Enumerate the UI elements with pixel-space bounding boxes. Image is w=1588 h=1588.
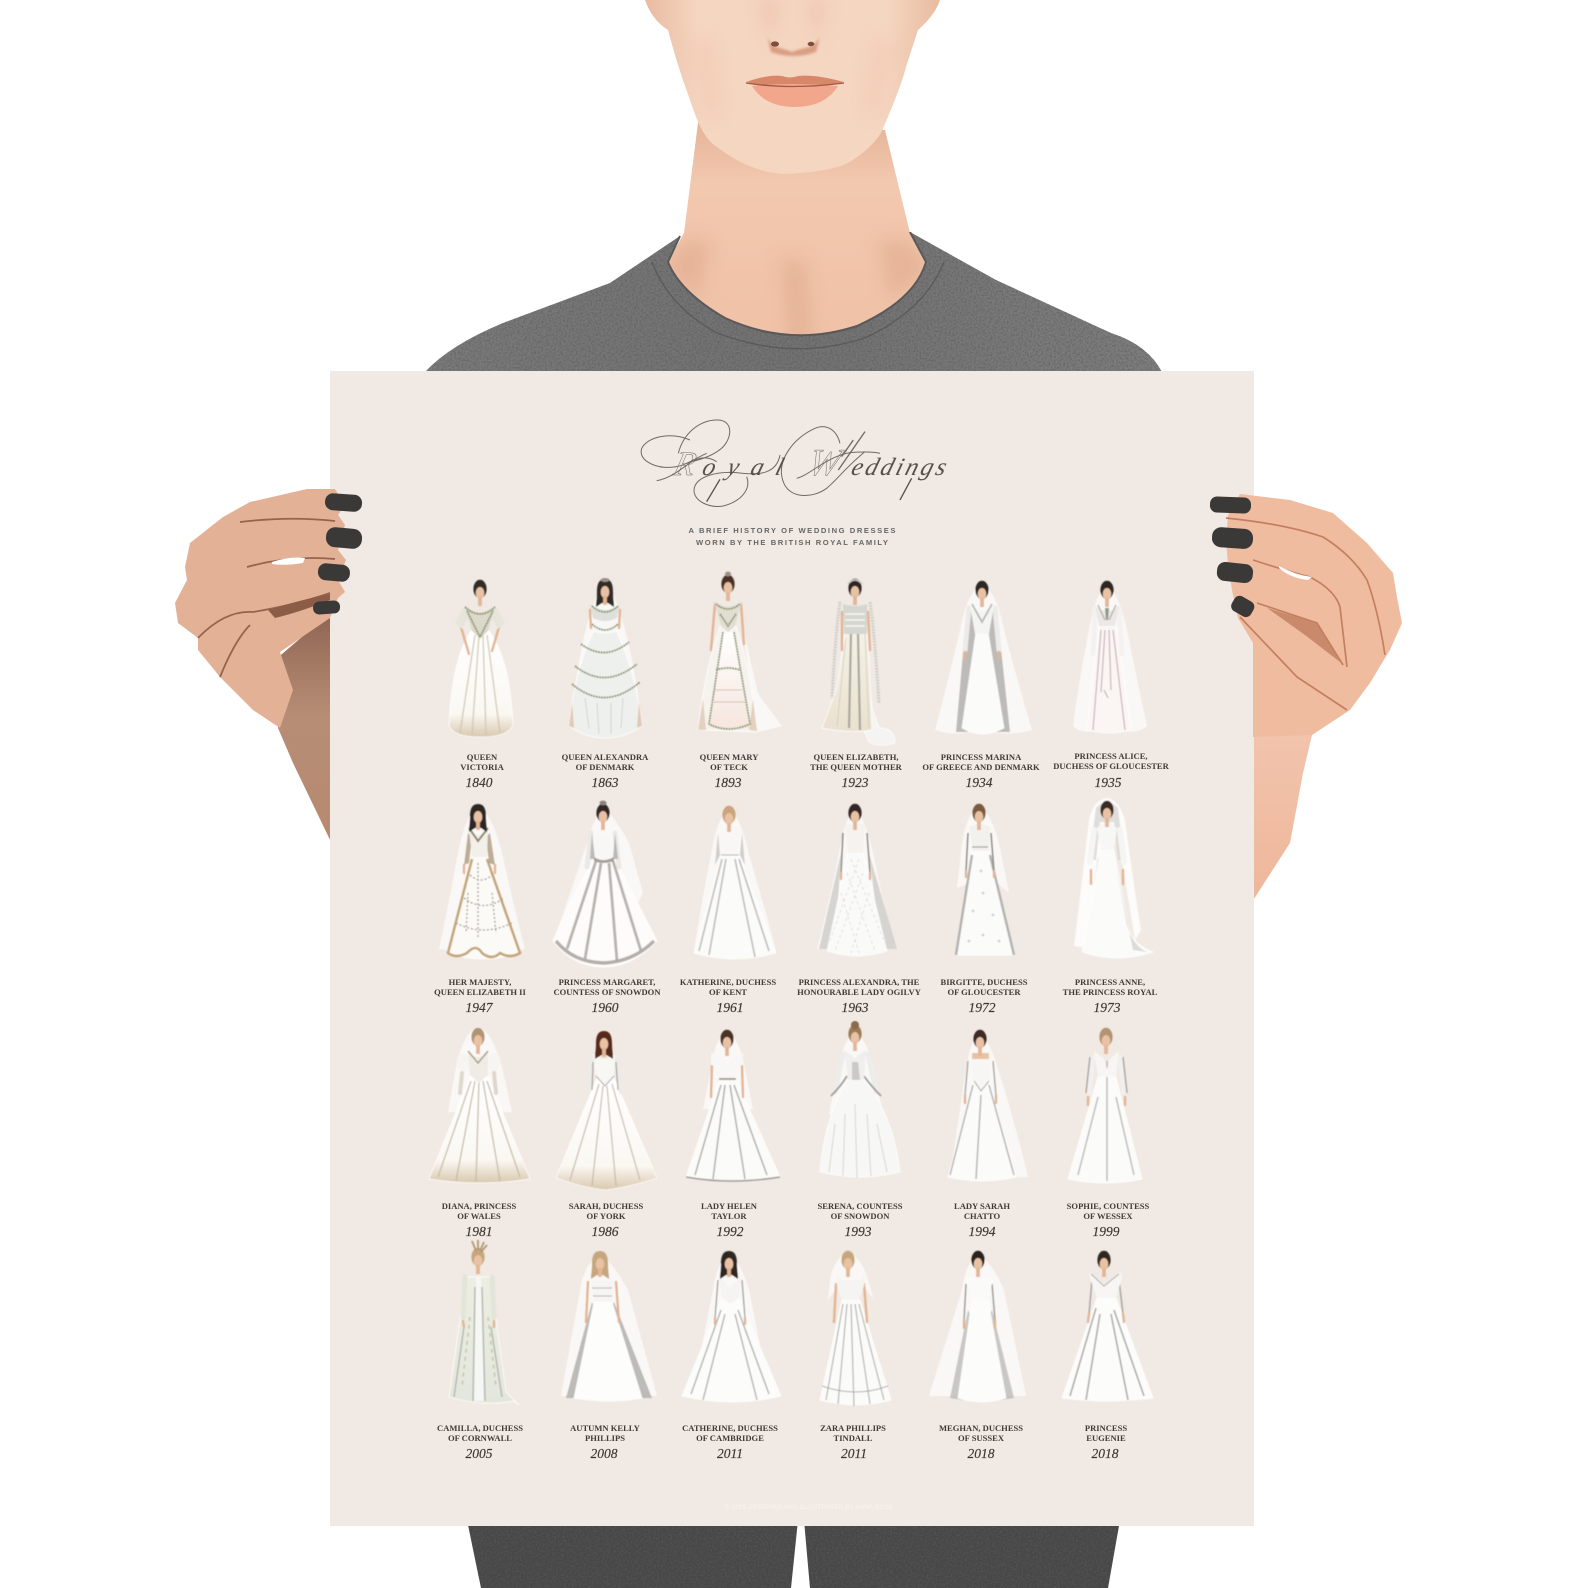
dress: Queen Elizabeth the Queen Mother [822,579,895,745]
caption: Autumn [570,1423,641,1461]
caption: Anne [1063,977,1158,1015]
caption: Sophie: SOPHIE, COUNTESS [1067,1201,1150,1211]
figure: grey t-shirt [425,232,1162,372]
dress: Sophie Countess of Wessex [1068,1028,1142,1183]
caption: Queen Alexandra [562,752,649,790]
caption: Queen Victoria: VICTORIA [460,762,505,772]
panel: poster [330,371,1254,1526]
caption: Meghan [939,1423,1023,1461]
caption: Katharine: KATHERINE, DUCHESS [680,977,776,987]
figure: right forearm [1252,640,1312,902]
dress: Camilla Duchess of Cornwall [449,1240,519,1405]
dress: Zara Phillips Tindall [820,1251,891,1406]
caption: Queen Mother: 1923 [842,775,869,790]
left hand [175,489,363,728]
caption: Alexandra Ogilvy: 1963 [842,1000,869,1015]
dress: Queen Victoria [449,580,513,737]
dress: Princess Alice [1073,581,1147,733]
caption: Chatto: 1994 [968,1224,996,1239]
caption: Princess Marina [922,752,1040,790]
caption: Eugenie: PRINCESS [1085,1423,1127,1433]
nails: left hand [313,493,363,615]
caption: Diana [442,1201,517,1239]
dress: Princess Anne [1074,798,1153,958]
caption: Helen: TAYLOR [711,1211,747,1221]
title text: oyal [699,452,787,481]
caption: Elizabeth II [434,977,527,1015]
caption: Diana: 1981 [466,1224,492,1239]
labels: row 3 [442,1201,1150,1239]
caption: Zara: ZARA PHILLIPS [820,1423,886,1433]
caption: Autumn: AUTUMN KELLY [570,1423,641,1433]
title text: eddings [848,452,951,481]
caption: Eugenie [1085,1423,1127,1461]
caption: Serena [817,1201,903,1239]
caption: Queen Victoria: 1840 [466,775,493,790]
subtitle [688,526,896,547]
caption: Autumn: PHILLIPS [585,1433,625,1443]
caption: Meghan: OF SUSSEX [958,1433,1005,1443]
caption: Elizabeth II: HER MAJESTY, [449,977,511,987]
caption: Queen Alexandra: 1863 [592,775,619,790]
caption: Eugenie: EUGENIE [1086,1433,1126,1443]
caption: Anne: 1973 [1094,1000,1121,1015]
title text [669,443,951,484]
caption: Princess Marina: OF GREECE AND DENMARK [922,762,1040,772]
caption: Camilla: CAMILLA, DUCHESS [437,1423,523,1433]
right hand [1210,494,1402,737]
caption: Chatto: CHATTO [964,1211,1000,1221]
caption: Camilla [437,1423,523,1461]
caption: Birgitte: OF GLOUCESTER [947,987,1021,997]
dress: Queen Elizabeth II [439,804,525,959]
caption: Margaret [553,977,661,1015]
caption: Meghan: MEGHAN, DUCHESS [939,1423,1023,1433]
caption: Elizabeth II: QUEEN ELIZABETH II [434,987,527,997]
caption: Helen: LADY HELEN [701,1201,758,1211]
caption: Katharine: OF KENT [709,987,747,997]
caption: Queen Mary [700,752,759,790]
caption: Sarah: SARAH, DUCHESS [569,1201,644,1211]
caption: Queen Mary: QUEEN MARY [700,752,759,762]
caption: Anne: PRINCESS ANNE, [1075,977,1145,987]
caption: Princess Alice [1053,751,1170,790]
caption: Chatto: LADY SARAH [954,1201,1010,1211]
dress: Queen Alexandra [569,578,642,738]
labels: row 2 [434,977,1158,1015]
caption: Princess Marina: PRINCESS MARINA [941,752,1022,762]
caption: Sarah: OF YORK [586,1211,626,1221]
caption: Queen Mother: THE QUEEN MOTHER [810,762,903,772]
caption: Catherine: OF CAMBRIDGE [696,1433,764,1443]
caption: Queen Mary: OF TECK [710,762,748,772]
dress: Lady Helen Taylor [686,1030,780,1181]
caption: Alexandra Ogilvy [797,977,922,1015]
title [641,420,951,506]
caption: Zara: TINDALL [834,1433,873,1443]
footer credit: © 2018 DESIGNED AND ILLUSTRATED BY ANNA ROSE [725,1504,893,1511]
dress: Princess Eugenie [1062,1251,1153,1401]
dress: Meghan Duchess of Sussex [929,1251,1026,1402]
dress: Serena Countess of Snowdon [820,1021,900,1178]
figure: dark trousers [467,1520,1120,1588]
figure: woman's head and neck [645,0,940,345]
caption: Zara: 2011 [841,1446,867,1461]
caption: Birgitte [941,977,1028,1015]
caption: Camilla: OF CORNWALL [448,1433,512,1443]
dress: Princess Alexandra [817,804,897,956]
caption: Sophie: OF WESSEX [1083,1211,1133,1221]
labels: row 4 [437,1423,1127,1461]
caption: Princess Alice: PRINCESS ALICE, [1074,751,1148,761]
caption: Eugenie: 2018 [1092,1446,1119,1461]
caption: Zara [820,1423,886,1461]
caption: Camilla: 2005 [466,1446,493,1461]
caption: Princess Alice: DUCHESS OF GLOUCESTER [1053,761,1170,771]
caption: Katharine: 1961 [716,1000,744,1015]
title text: R [669,445,700,483]
dress: Princess Marina [935,581,1032,734]
labels: row 1 [460,751,1170,790]
caption: Sarah: 1986 [592,1224,619,1239]
dress: Lady Sarah Chatto [948,1030,1028,1181]
caption: Alexandra Ogilvy: HONOURABLE LADY OGILVY [797,987,922,997]
caption: Birgitte: 1972 [968,1000,996,1015]
caption: Meghan: 2018 [968,1446,995,1461]
caption: Katharine [680,977,776,1015]
subtitle: WORN BY THE BRITISH ROYAL FAMILY [696,538,888,547]
dress: Princess Margaret [553,801,657,967]
nails: right hand [1210,496,1257,619]
caption: Serena: SERENA, COUNTESS [817,1201,903,1211]
dress: Autumn Kelly Phillips [561,1251,657,1401]
caption: Alexandra Ogilvy: PRINCESS ALEXANDRA, THE [799,977,920,987]
caption: Queen Victoria: QUEEN [467,752,498,762]
dress: Sarah Duchess of York [556,1031,657,1190]
caption: Princess Marina: 1934 [966,775,993,790]
caption: Sarah [569,1201,644,1239]
caption: Queen Victoria [460,752,505,790]
dress: Diana Princess of Wales [429,1027,530,1183]
caption: Birgitte: BIRGITTE, DUCHESS [941,977,1028,987]
caption: Sophie [1067,1201,1150,1239]
caption: Catherine [682,1423,778,1461]
title swashes [641,420,912,506]
caption: Queen Mother: QUEEN ELIZABETH, [813,752,899,762]
caption: Serena: 1993 [844,1224,872,1239]
caption: Margaret: 1960 [592,1000,619,1015]
dress: Catherine Duchess of Cambridge [682,1251,781,1402]
caption: Serena: OF SNOWDON [831,1211,890,1221]
title text: W [804,443,850,484]
caption: Queen Alexandra: QUEEN ALEXANDRA [562,752,649,762]
dress: Katharine Duchess of Kent [694,806,776,959]
caption: Diana: DIANA, PRINCESS [442,1201,517,1211]
caption: Queen Alexandra: OF DENMARK [576,762,635,772]
caption: Margaret: PRINCESS MARGARET, [559,977,655,987]
caption: Catherine: 2011 [717,1446,743,1461]
caption: Margaret: COUNTESS OF SNOWDON [553,987,661,997]
caption: Autumn: 2008 [590,1446,618,1461]
caption: Princess Alice: 1935 [1094,775,1122,790]
caption: Chatto [954,1201,1010,1239]
caption: Anne: THE PRINCESS ROYAL [1063,987,1158,997]
caption: Helen [701,1201,758,1239]
caption: Diana: OF WALES [457,1211,501,1221]
caption: Queen Mother [810,752,903,790]
caption: Helen: 1992 [716,1224,744,1239]
caption: Elizabeth II: 1947 [466,1000,494,1015]
caption: Catherine: CATHERINE, DUCHESS [682,1423,778,1433]
figure: left forearm in shadow [275,612,331,842]
caption: Sophie: 1999 [1092,1224,1120,1239]
dress: Queen Mary [698,572,782,732]
dress: Birgitte Duchess of Gloucester [956,804,1014,955]
subtitle: A BRIEF HISTORY OF WEDDING DRESSES [688,526,896,535]
caption: Queen Mary: 1893 [714,775,742,790]
